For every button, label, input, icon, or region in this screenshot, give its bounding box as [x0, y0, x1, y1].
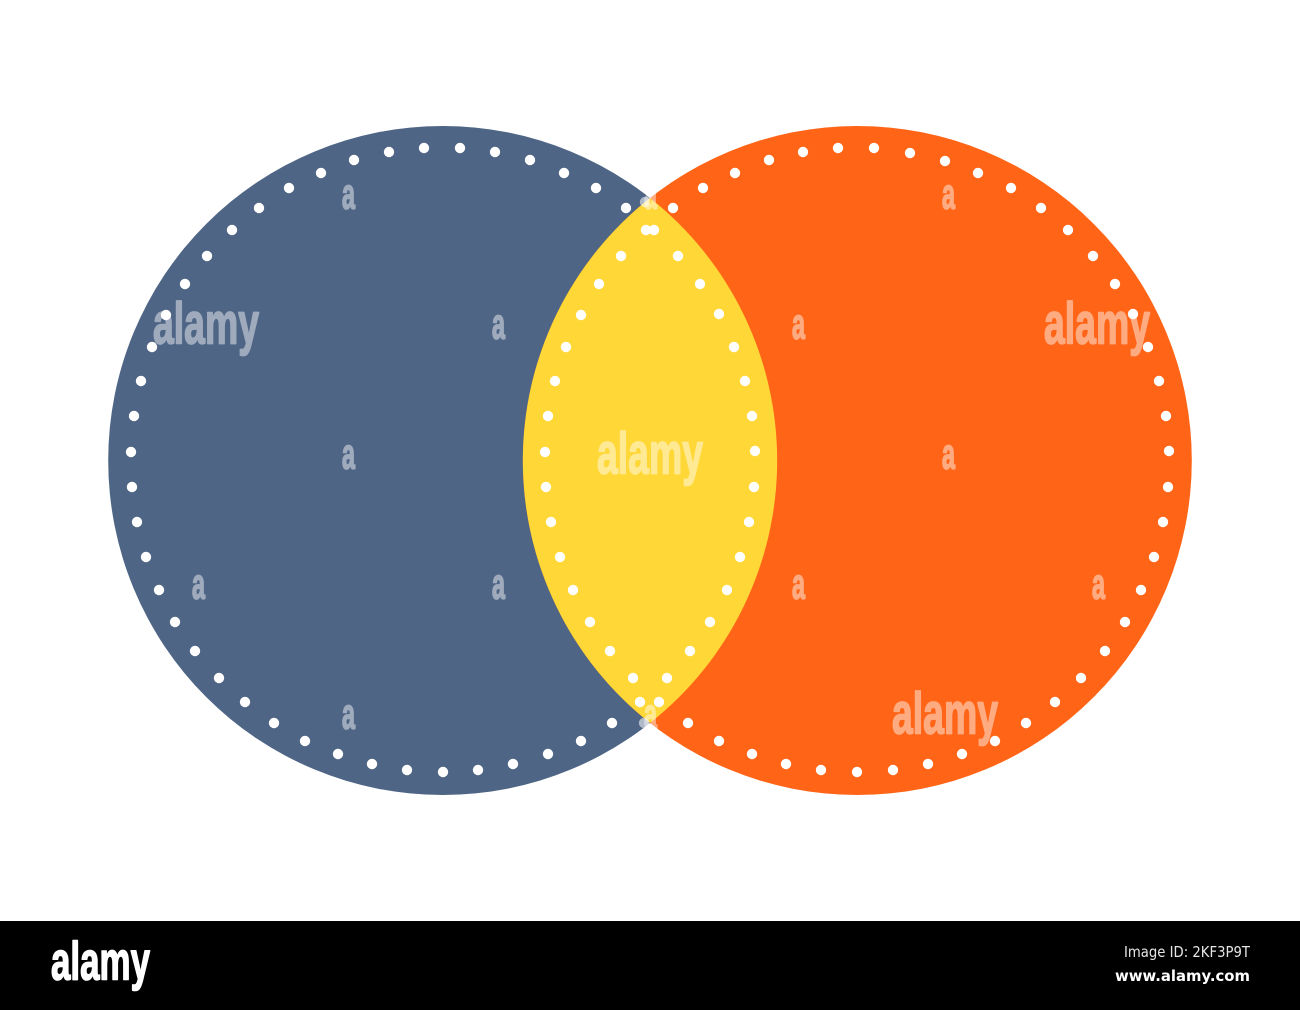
- watermark text layer: a: [792, 560, 806, 608]
- watermark text layer: a: [644, 690, 658, 738]
- panel: left blue circle: [108, 126, 777, 795]
- watermark text layer: alamy: [153, 292, 259, 356]
- footer bar: [0, 921, 1300, 1010]
- watermark text layer: a: [942, 430, 956, 478]
- watermark text layer: alamy: [597, 422, 703, 486]
- watermark text layer: a: [342, 690, 356, 738]
- watermark text layer: alamy: [892, 682, 998, 746]
- watermark text layer: a: [644, 170, 658, 218]
- image id text: Image ID: 2KF3P9T: [1124, 943, 1251, 961]
- dotted border: overlap lens: [540, 225, 760, 707]
- website text: www.alamy.com: [1115, 967, 1250, 985]
- watermark text layer: a: [942, 170, 956, 218]
- dotted border: left circle: [126, 143, 650, 777]
- dotted border: right circle: [668, 143, 1174, 777]
- watermark text layer: a: [342, 430, 356, 478]
- footer logo text: alamy: [51, 932, 150, 992]
- watermark text layer: a: [1092, 560, 1106, 608]
- watermark text layer: a: [492, 560, 506, 608]
- watermark text layer: a: [792, 300, 806, 348]
- watermark text layer: a: [192, 560, 206, 608]
- watermark text layer: a: [342, 170, 356, 218]
- panel: yellow overlap lens: [523, 198, 777, 723]
- watermark text layer: a: [492, 300, 506, 348]
- watermark text layer: [153, 170, 1150, 746]
- panel: right orange circle: [523, 126, 1192, 795]
- watermark text layer: alamy: [1044, 292, 1150, 356]
